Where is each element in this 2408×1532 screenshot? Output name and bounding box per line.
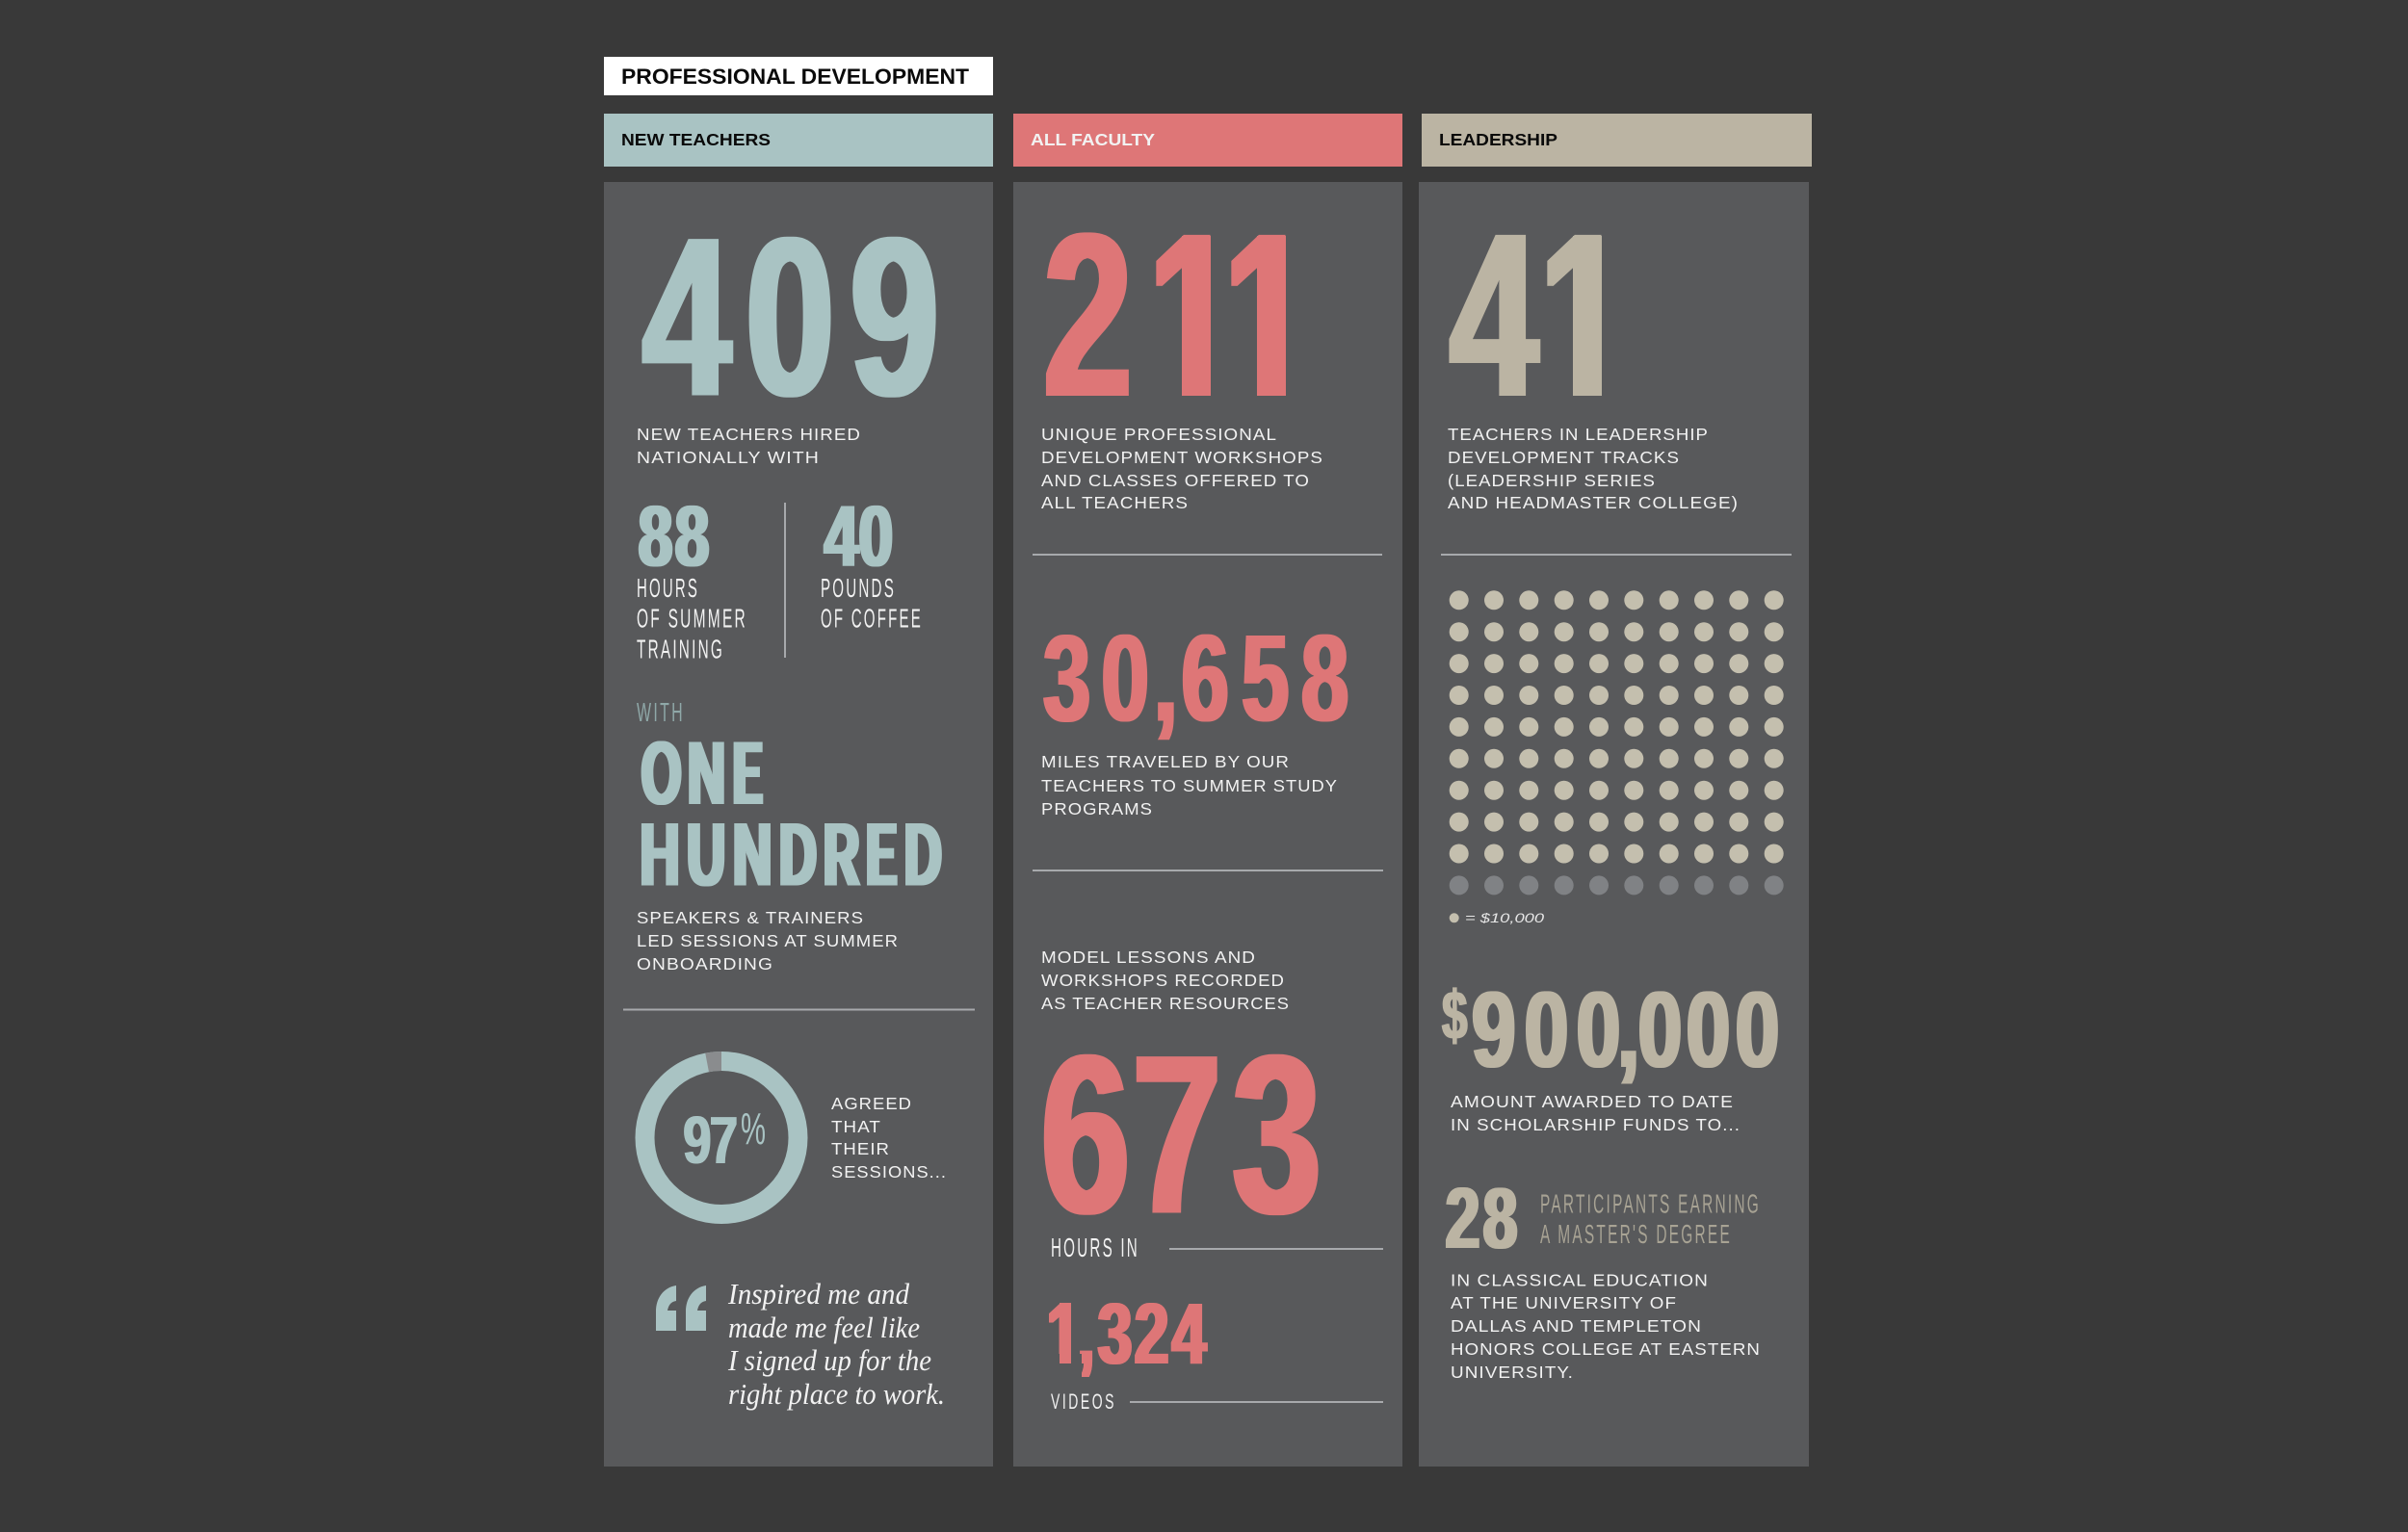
text: speakers and trainers: SPEAKERS & TRAINERS [637,908,864,927]
big number 41 [1449,235,1602,396]
donut chart: 97%: 97 [683,1104,738,1179]
title: PROFESSIONAL DEVELOPMENT [621,65,970,89]
stat: 88 hours: TRAINING [637,634,724,664]
text: new teachers hired: NEW TEACHERS HIRED [637,425,861,444]
text: model lessons: WORKSHOPS RECORDED [1041,971,1285,990]
big number 30,658: 30,658 [1043,610,1348,747]
donut chart: 97% [645,1061,798,1214]
stat: 88 hours: OF SUMMER [637,603,747,634]
stat: 40 pounds [821,487,923,634]
text: unique workshops: DEVELOPMENT WORKSHOPS [1041,448,1323,467]
text: agreed that their sessions: AGREED [831,1094,912,1113]
stat: 88 hours [637,487,747,664]
text: classical education: IN CLASSICAL EDUCATION [1451,1271,1709,1290]
text: classical education: AT THE UNIVERSITY OF [1451,1293,1677,1312]
header: all faculty: ALL FACULTY [1031,130,1155,149]
stat: 28 participants: 28 [1446,1169,1517,1267]
header: new teachers [604,114,993,167]
dot chart: $10,000 per dot [1450,590,1784,895]
legend: dot equals $10,000 [1450,910,1544,925]
text: classical education: UNIVERSITY. [1451,1363,1574,1382]
panel: new teachers [604,182,993,1467]
big number 41: 41 [1450,186,1628,447]
text: teachers in leadership [1448,425,1739,512]
quote text: made me feel like [728,1311,920,1344]
donut chart: 97%: % [741,1104,766,1154]
text: miles traveled [1041,752,1338,818]
label: videos: VIDEOS [1051,1389,1116,1414]
big number $900,000: 900,000 [1472,969,1779,1090]
stat: 40 pounds: OF COFFEE [821,603,923,634]
text: new teachers hired [637,425,861,467]
text: model lessons: MODEL LESSONS AND [1041,948,1256,967]
text: teachers in leadership: (LEADERSHIP SERIES [1448,471,1656,490]
legend: dot equals $10,000: = $10,000 [1465,910,1544,925]
header: leadership [1422,114,1812,167]
header: leadership: LEADERSHIP [1439,130,1557,149]
stat: 28 participants [1446,1169,1761,1267]
stat: 88 hours: HOURS [637,573,699,603]
text: agreed that their sessions [831,1094,947,1181]
stat: 28 participants: PARTICIPANTS EARNING [1540,1188,1761,1219]
stat: 88 hours: 88 [639,487,709,584]
text: speakers and trainers [637,908,899,974]
text: classical education [1451,1271,1761,1382]
text: unique workshops: UNIQUE PROFESSIONAL [1041,425,1277,444]
text: with: WITH [637,697,685,727]
text: teachers in leadership: DEVELOPMENT TRACKS [1448,448,1680,467]
big number $900,000: $ [1442,976,1467,1053]
big number 409: 409 [642,191,939,444]
text: new teachers hired: NATIONALLY WITH [637,448,820,467]
stat: 28 participants: A MASTER'S DEGREE [1540,1219,1732,1249]
panel: leadership [1419,182,1809,1467]
text: teachers in leadership: AND HEADMASTER COLLEGE) [1448,493,1739,512]
header: new teachers: NEW TEACHERS [621,130,771,149]
text: amount awarded [1451,1092,1741,1134]
stat: 40 pounds: POUNDS [821,573,896,603]
text: classical education: DALLAS AND TEMPLETON [1451,1316,1702,1336]
quote text: I signed up for the [727,1343,931,1377]
quote text: Inspired me and [727,1277,909,1311]
text: unique workshops [1041,425,1323,512]
text: teachers in leadership: TEACHERS IN LEADERSHIP [1448,425,1709,444]
text: speakers and trainers: ONBOARDING [637,954,773,974]
quote text [727,1277,945,1411]
text: agreed that their sessions: SESSIONS... [831,1162,947,1181]
text: miles traveled: PROGRAMS [1041,799,1153,818]
text: speakers and trainers: LED SESSIONS AT SUMMER [637,931,899,950]
icon: quotation mark [656,1285,706,1331]
text: agreed that their sessions: THAT [831,1117,881,1136]
heading: one hundred [638,708,946,911]
big number 211: 211 [1043,186,1312,447]
text: miles traveled: TEACHERS TO SUMMER STUDY [1041,776,1338,795]
stat: 40 pounds: 40 [824,487,893,584]
text: agreed that their sessions: THEIR [831,1139,890,1158]
text: miles traveled: MILES TRAVELED BY OUR [1041,752,1290,771]
text: classical education: HONORS COLLEGE AT EASTERN [1451,1339,1761,1359]
quote text: right place to work. [728,1377,945,1411]
text: model lessons: AS TEACHER RESOURCES [1041,994,1290,1013]
label: hours in: HOURS IN [1051,1233,1139,1262]
header: all faculty [1013,114,1402,167]
text: amount awarded: AMOUNT AWARDED TO DATE [1451,1092,1734,1111]
big number 673: 673 [1041,1008,1322,1261]
number 1,324: 1,324 [1047,1285,1206,1383]
big number 211 [1046,232,1286,396]
text: model lessons [1041,948,1290,1013]
panel: all faculty [1013,182,1402,1467]
text: amount awarded: IN SCHOLARSHIP FUNDS TO... [1451,1115,1741,1134]
text: unique workshops: AND CLASSES OFFERED TO [1041,471,1310,490]
text: unique workshops: ALL TEACHERS [1041,493,1189,512]
heading: one hundred: HUNDRED [638,790,946,911]
title [604,57,993,95]
heading: one hundred: ONE [640,708,768,829]
